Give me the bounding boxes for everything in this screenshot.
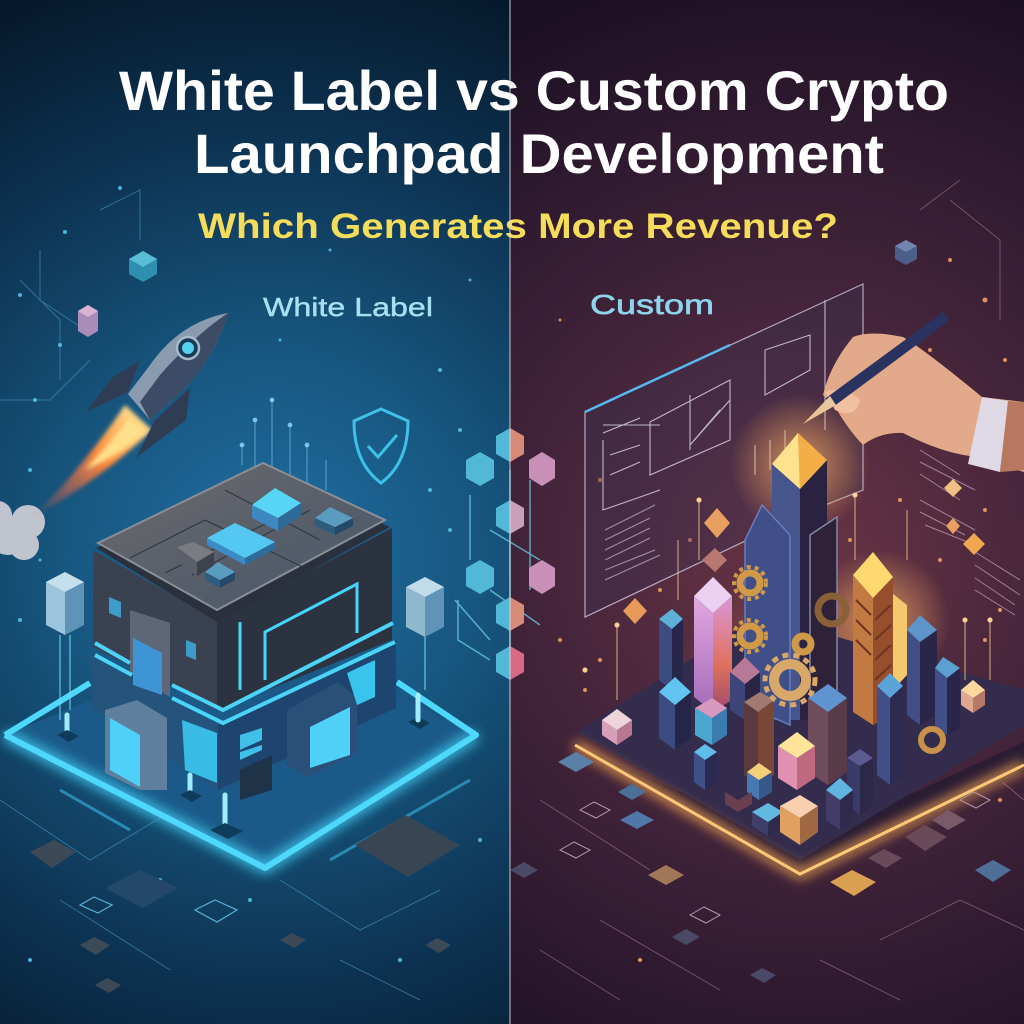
icon: right floor chips xyxy=(510,752,1011,983)
foreground cubes xyxy=(602,680,985,845)
icon: rocket xyxy=(35,313,228,515)
text lines xyxy=(920,450,1020,615)
centre cube network xyxy=(455,428,555,680)
hand with pen xyxy=(803,312,1024,472)
building xyxy=(90,463,396,800)
gears xyxy=(734,567,943,751)
upper block xyxy=(93,528,395,723)
right platform xyxy=(575,615,1024,880)
icon: pink cube xyxy=(78,305,98,337)
divider xyxy=(509,0,511,1024)
schematic panel xyxy=(585,284,1020,617)
icon: lower chips xyxy=(30,815,460,993)
floating crystals xyxy=(623,479,985,624)
title xyxy=(119,59,949,185)
subtitle: Which Generates More Revenue? xyxy=(198,207,838,246)
left platform xyxy=(3,630,476,868)
icon: shield xyxy=(354,409,408,483)
glow behind city xyxy=(670,395,950,830)
icon: left side cubes xyxy=(46,572,444,720)
icon: right cube xyxy=(895,240,917,265)
title: White Label vs Custom Crypto xyxy=(119,59,949,122)
lower block xyxy=(90,640,396,800)
icon: top-left cube xyxy=(129,251,157,282)
label: white label: White Label xyxy=(263,292,433,322)
blue towers xyxy=(659,609,960,815)
prism tower xyxy=(694,577,732,712)
roof chips xyxy=(177,488,353,588)
central tower xyxy=(745,433,837,735)
data streams above building xyxy=(240,398,326,490)
icon: cloud xyxy=(0,501,45,560)
crystal city xyxy=(583,433,992,845)
gold tower xyxy=(853,552,907,725)
panel: white label background xyxy=(0,0,510,1024)
panel: custom background xyxy=(510,0,1024,1024)
platform lamps xyxy=(57,695,430,839)
label: custom: Custom xyxy=(590,289,714,320)
lamp posts xyxy=(583,493,992,700)
roof xyxy=(96,463,390,622)
title: Launchpad Development xyxy=(194,122,884,185)
